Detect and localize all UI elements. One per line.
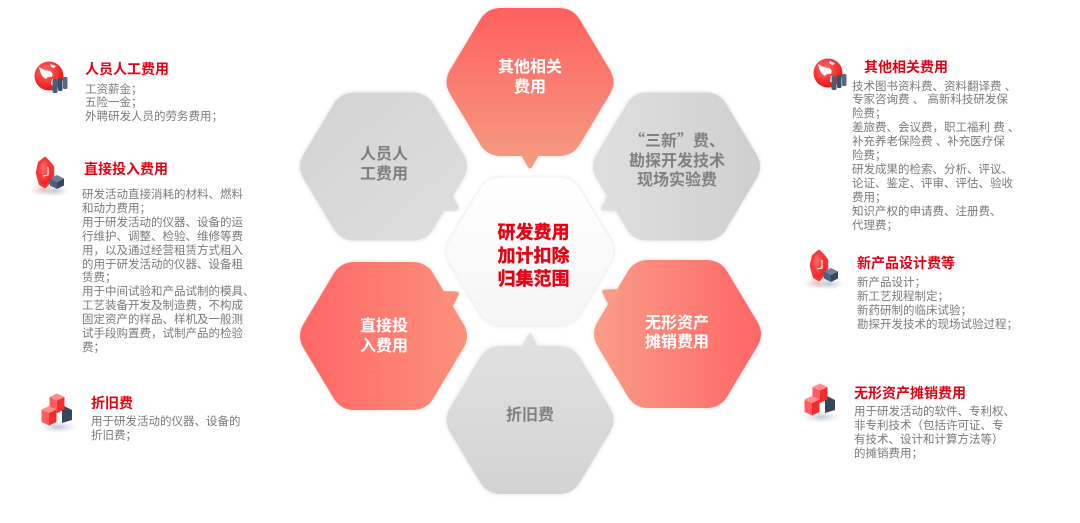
text block: 勘探开发技术的现场试验过程； <box>857 319 1018 331</box>
hexagon: 人员人工费用: 工费用 <box>360 165 408 183</box>
hexagon: 其他相关费用: 其他相关 <box>498 57 562 76</box>
text block: 新产品设计； <box>857 277 926 289</box>
hexagon: 无形资产摊销费用: 无形资产 <box>645 314 709 332</box>
text block: 五险一金； <box>85 97 142 109</box>
panel: 直接投入费用 <box>32 156 254 354</box>
text block: 用于研发活动的仪器、设备的运 <box>82 217 243 229</box>
text block: 工艺装备开发及制造费，不构成 <box>82 300 243 312</box>
text block: 固定资产的样品、样机及一般测 <box>82 314 243 326</box>
text block: 有技术、设计和计算方法等） <box>854 434 1004 446</box>
text block: 试手段购置费，试制产品的检验 <box>82 328 243 340</box>
text block <box>85 83 223 123</box>
text block: 险费； <box>852 150 886 162</box>
heading: 人员人工费用 <box>85 61 169 77</box>
icon: globe <box>814 58 846 90</box>
text block: 论证、鉴定、评审、评估、验收 <box>852 178 1013 190</box>
text block <box>82 188 254 354</box>
hexagon: 直接投入费用 <box>300 262 467 410</box>
hexagon: 三新费: “三新”费、 <box>629 127 725 151</box>
hexagon: 其他相关费用: 费用 <box>514 78 546 96</box>
text block: 代理费； <box>852 220 898 232</box>
text block: 新药研制的临床试验； <box>857 305 972 317</box>
text block: 折旧费； <box>91 430 137 442</box>
panel: 折旧费 <box>42 394 240 442</box>
icon: shield with cube <box>32 156 68 196</box>
text block <box>857 276 1018 331</box>
hexagon: 直接投入费用: 入费用 <box>360 337 408 355</box>
text block <box>91 415 240 442</box>
hexagon: 折旧费: 折旧费 <box>506 406 554 424</box>
text block: 补充养老保险费 、补充医疗保 <box>852 136 1005 148</box>
text block: 专家咨询费 、 高新科技研发保 <box>852 94 1008 106</box>
text block: 外聘研发人员的劳务费用； <box>85 111 223 123</box>
text block <box>852 80 1019 232</box>
hexagon: 三新费: 现场实验费 <box>637 166 717 190</box>
text block: 赁费； <box>82 272 116 284</box>
text block: 技术图书资料费、资料翻译费 、 <box>852 80 1016 92</box>
center hexagon: 研发费用加计扣除归集范围: 归集范围 <box>498 269 570 289</box>
hexagon: 三新费: 勘探开发技术 <box>629 147 725 171</box>
text block: 的摊销费用； <box>854 448 923 460</box>
hexagon: 三新费 <box>593 92 760 240</box>
hexagon: 其他相关费用 <box>446 8 614 168</box>
text block: 知识产权的申请费、注册费、 <box>852 206 1002 218</box>
icon: red cubes <box>804 384 836 422</box>
hexagon: 人员人工费用: 人员人 <box>360 146 408 163</box>
icon: shield with cube <box>806 250 842 289</box>
center hexagon: 研发费用加计扣除归集范围: 加计扣除 <box>498 245 570 266</box>
text block: 和动力费用； <box>82 203 151 215</box>
text block: 用，以及通过经营租赁方式租入 <box>82 245 243 257</box>
icon: red cubes <box>42 394 74 432</box>
text block: 非专利技术（包括许可证、专 <box>854 420 1004 432</box>
heading: 新产品设计费等 <box>857 255 955 271</box>
icon: globe <box>34 62 68 93</box>
text block: 费用； <box>852 192 886 204</box>
hexagon: 无形资产摊销费用: 摊销费用 <box>645 332 709 351</box>
heading: 其他相关费用 <box>864 59 948 75</box>
panel: 人员人工费用 <box>34 61 223 123</box>
text block: 用于研发活动的仪器、设备的 <box>91 416 240 428</box>
hexagon: 无形资产摊销费用 <box>594 260 761 408</box>
text block: 用于研发活动的软件、专利权、 <box>854 406 1015 418</box>
text block: 研发活动直接消耗的材料、燃料 <box>82 189 243 201</box>
text block: 差旅费、会议费，职工福利 费 、 <box>852 122 1019 134</box>
heading: 无形资产摊销费用 <box>854 385 966 401</box>
center hexagon: 研发费用加计扣除归集范围: 研发费用 <box>498 222 570 242</box>
text block: 新工艺规程制定； <box>857 291 949 303</box>
center hexagon: 研发费用加计扣除归集范围 <box>446 178 614 326</box>
hexagon: 人员人工费用 <box>300 92 467 240</box>
text block: 险费； <box>852 108 886 120</box>
panel: 无形资产摊销费用 <box>804 384 1015 460</box>
heading: 直接投入费用 <box>84 161 168 177</box>
text block <box>854 405 1015 460</box>
panel: 新产品设计费等 <box>806 250 1018 331</box>
text block: 行维护、调整、检验、维修等费 <box>82 231 243 243</box>
text block: 费； <box>82 342 105 354</box>
text block: 工资薪金； <box>85 84 142 96</box>
text block: 研发成果的检索、分析、评议、 <box>852 164 1013 176</box>
text block: 的用于研发活动的仪器、设备租 <box>82 259 243 271</box>
panel: 其他相关费用 <box>814 58 1019 232</box>
hexagon: 直接投入费用: 直接投 <box>360 316 408 335</box>
hexagon: 折旧费 <box>446 334 614 494</box>
heading: 折旧费 <box>91 395 133 411</box>
text block: 用于中间试验和产品试制的模具、 <box>82 286 254 298</box>
